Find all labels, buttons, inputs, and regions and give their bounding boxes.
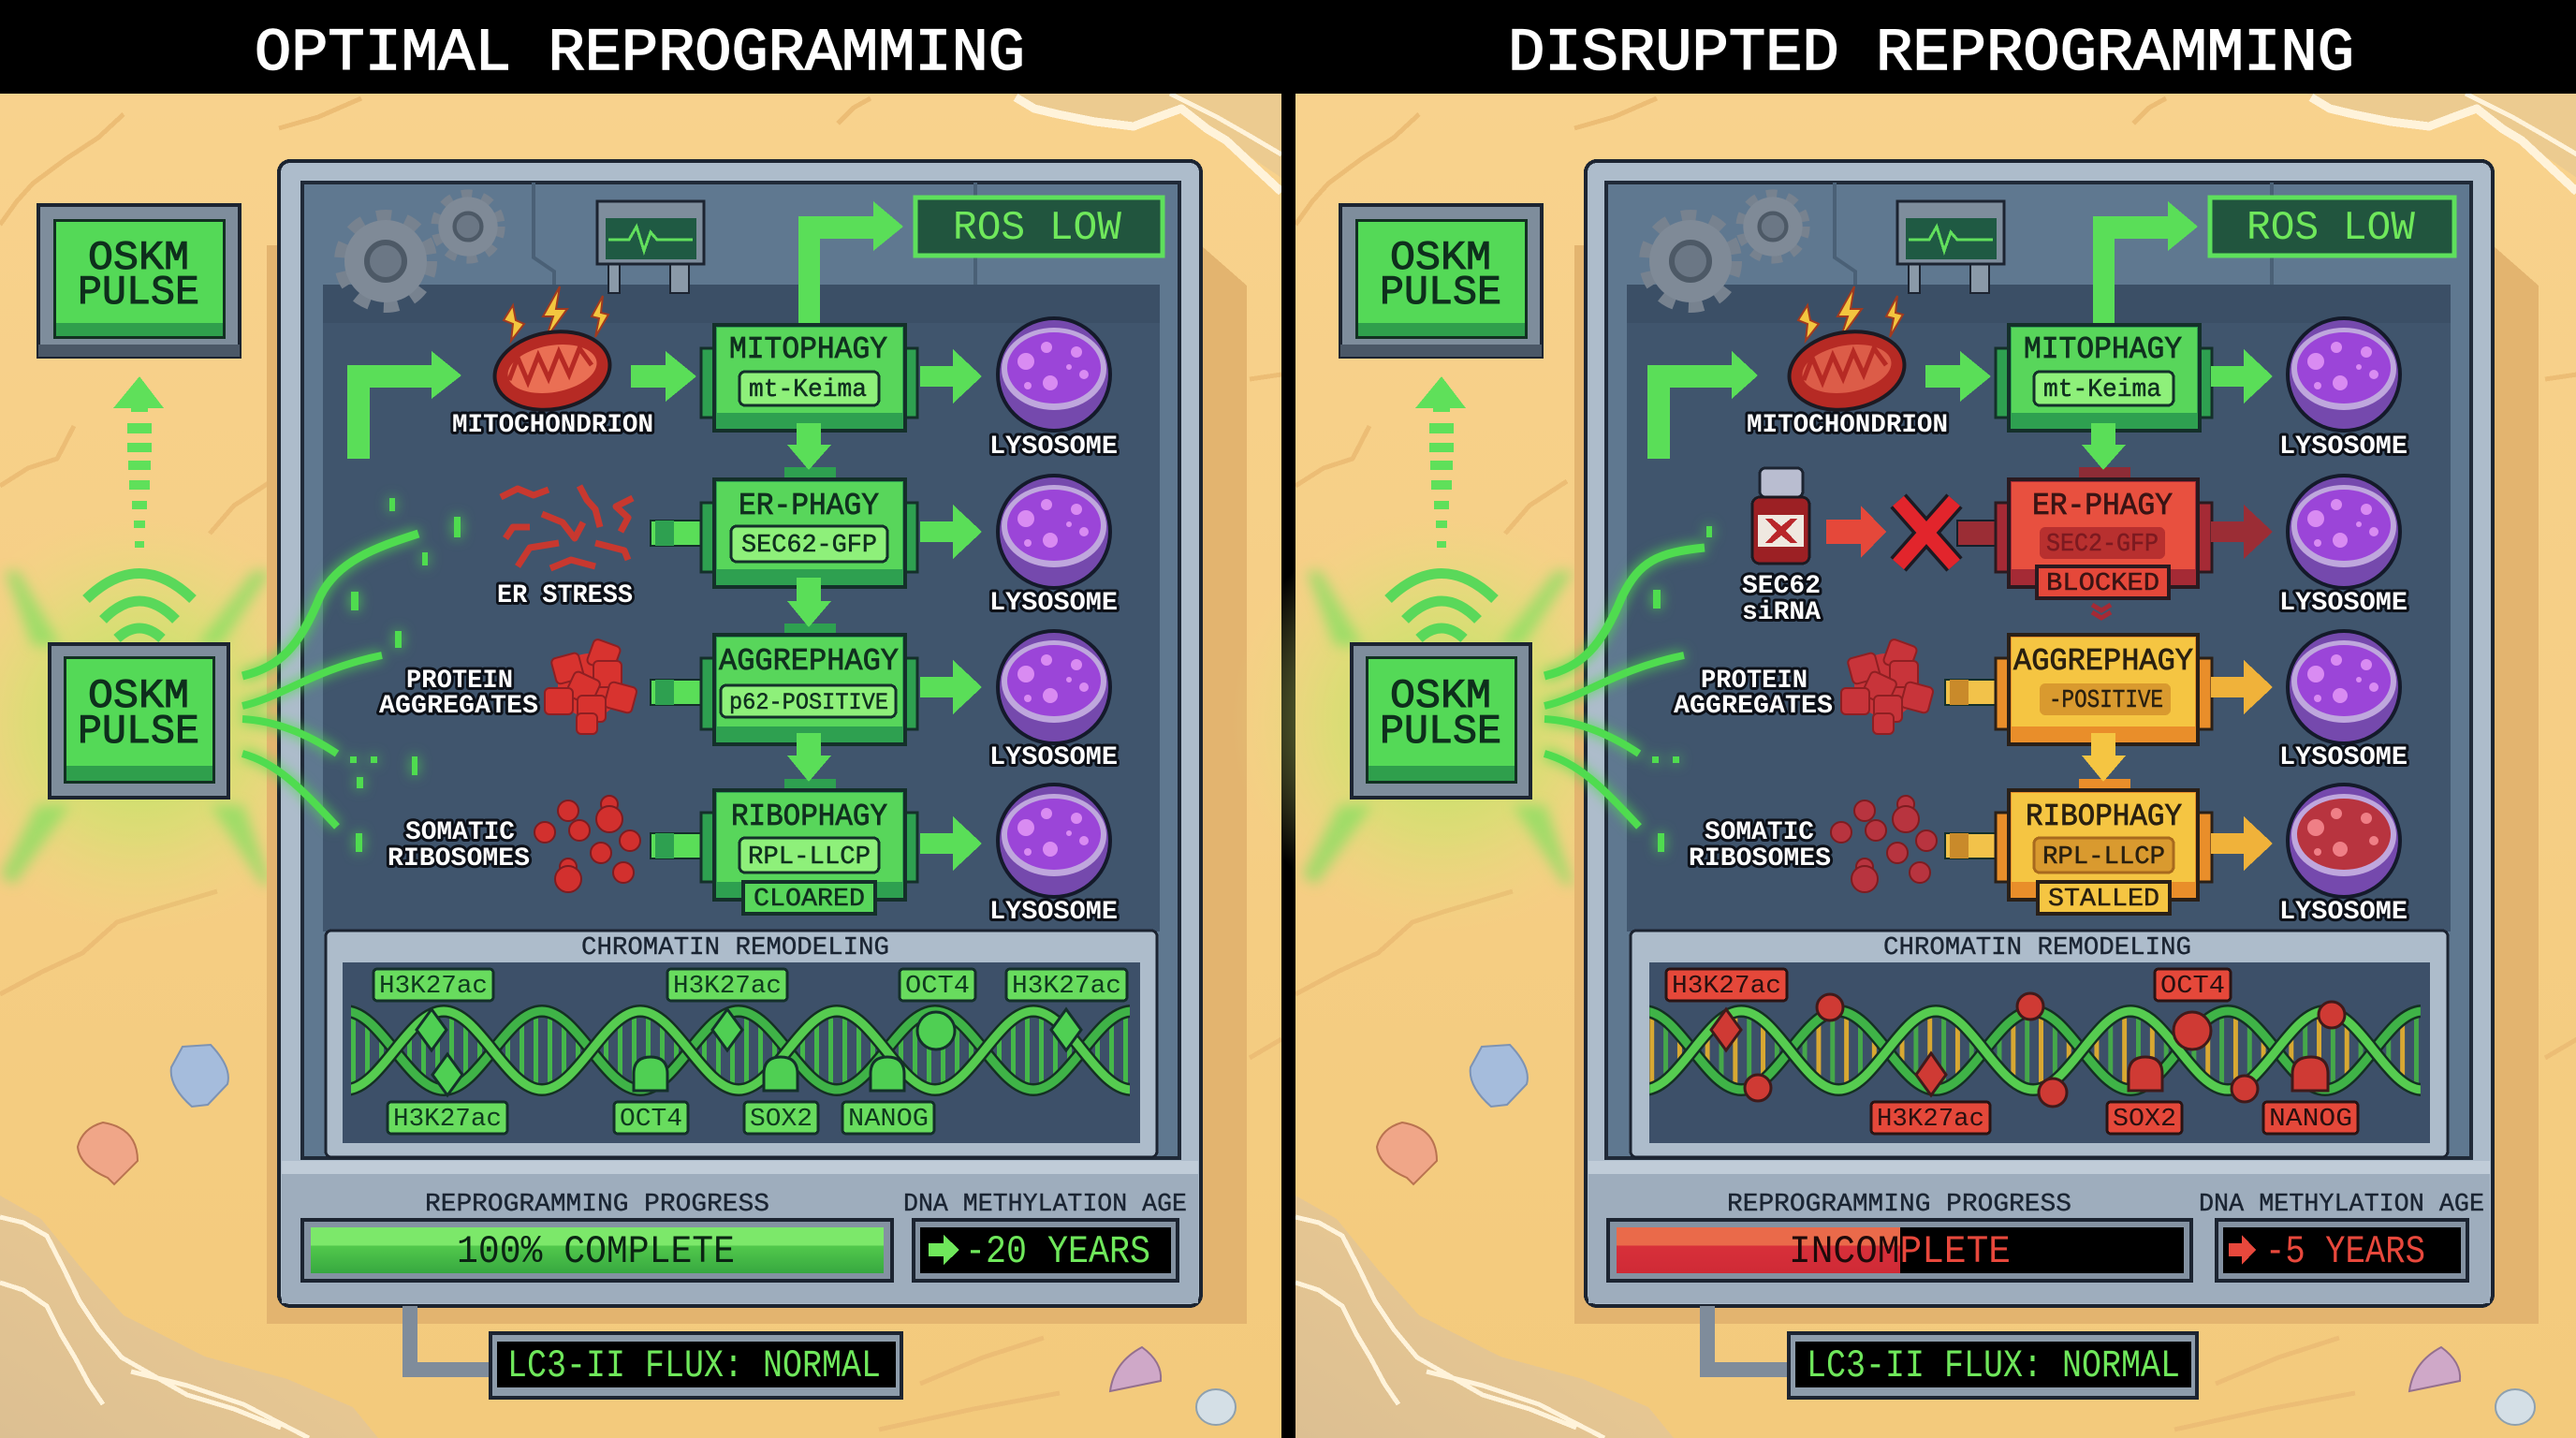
process box: ribophagy: RIBOPHAGY [2026,800,2182,834]
row: ribophagy [388,783,1118,927]
tags [1666,969,2358,1134]
arrow to lysosome [920,660,982,714]
status strip [1588,1161,2490,1303]
arrow: mitophagy to ROS [798,201,903,323]
center divider [1281,0,1295,1438]
label: SEC62 [1742,572,1821,601]
icon: peach shell [1377,1123,1437,1184]
icon: lower OSKM pulse button [50,644,228,798]
flux readout with cable [1707,1306,2197,1398]
tag: SOX2 [2113,1106,2176,1134]
lysosome: red stalled [2286,783,2402,899]
icon: red X block [1898,501,1954,565]
right beach side: pulse buttons and signal [1231,205,1652,932]
LC3-II flux box [1789,1333,2197,1398]
icon: heartbeat monitor [597,201,704,293]
icon: mitochondrion with stress bolts [489,286,616,418]
LC3-II flux box: LC3-II FLUX: NORMAL [1807,1343,2180,1388]
icon: heartbeat monitor [1897,201,2004,293]
icon: blue shell [1471,1045,1528,1107]
device frame [279,161,1201,1306]
process box: ER-phagy [701,479,917,587]
lysosome [996,629,1112,745]
progress bar [302,1220,892,1281]
icon: wireless signal arcs [1388,573,1495,638]
cable [1707,1306,1788,1370]
lysosome label: LYSOSOME [989,589,1118,618]
input stub [1945,680,1996,705]
label: siRNA [1742,598,1821,627]
input stub [1957,521,1997,546]
tag: H3K27ac [393,1106,502,1134]
status: ROS LOW: ROS LOW [2247,205,2416,252]
arrow [1925,351,1991,402]
label: DNA methylation age: DNA METHYLATION AGE [903,1191,1187,1219]
lysosome [996,474,1112,590]
label [1689,818,1831,873]
label: reprogramming progress: REPROGRAMMING PROGRESS [425,1191,769,1219]
process box: aggrephagy [701,635,917,744]
lysosome label: LYSOSOME [2279,743,2408,772]
process box: ribophagy: RPL-LLCP [2042,844,2165,872]
header bar [0,0,2576,94]
icon: ER stress fragments [501,486,633,568]
glow around lower pulse button [0,510,350,932]
status: ROS LOW: ROS LOW [953,205,1122,252]
lysosome label: LYSOSOME [2279,898,2408,927]
arrow to lysosome [2211,816,2273,871]
age readout [2217,1220,2467,1281]
disrupted histone marks [1711,993,2345,1107]
process box: ribophagy [1996,790,2212,914]
label: AGGREGATES [379,692,538,721]
tag: H3K27ac [673,973,782,1001]
icon: protein aggregate clump [1841,638,1934,734]
icon: upper OSKM pulse button: OSKM [1390,235,1491,282]
process box: ribophagy: CLOARED [754,886,865,914]
process box: aggrephagy: AGGREPHAGY [719,644,899,679]
arrow: down to ribophagy [784,733,836,792]
process box: ER-phagy: ER-PHAGY [2032,489,2173,523]
icon: pink shell [2409,1347,2460,1391]
lysosome [2286,316,2402,433]
glow rays [0,571,271,885]
arrow to lysosome [920,505,982,559]
shells: right [1377,1045,2535,1425]
icon: lower OSKM pulse button: OSKM [88,673,189,720]
label: AGGREGATES [1674,692,1833,721]
flux readout with cable [410,1306,901,1398]
lysosome label: LYSOSOME [2279,433,2408,462]
arrow to lysosome [920,816,982,871]
shells: left [78,1045,1236,1425]
age readout: -20 YEARS [965,1229,1150,1274]
icon: protein aggregate clump [545,638,637,734]
icon: blocked flow chevrons [2092,605,2111,618]
tag: H3K27ac [379,973,488,1001]
upper machinery wall [1606,183,2471,1158]
arrow: down to aggrephagy [784,578,836,637]
label: RIBOSOMES [1689,844,1831,873]
label: PROTEIN [1701,667,1808,696]
LC3-II flux box [490,1333,901,1398]
row: ER-phagy [497,474,1118,618]
glow around lower pulse button [1231,510,1652,932]
tag: OCT4 [905,973,970,1001]
label: SOMATIC [1705,818,1814,847]
icon: somatic ribosomes [534,796,640,892]
arrow: mitophagy to ROS [2093,201,2198,323]
age readout: -5 YEARS [2265,1229,2425,1274]
process box: mitophagy: MITOPHAGY [729,332,887,367]
arrow to lysosome [2211,660,2273,714]
arrow: elbow into mitochondrion [347,351,461,459]
process box: mitophagy [1996,325,2212,431]
process box: ER-phagy: ER-PHAGY [739,489,879,523]
title: disrupted: DISRUPTED REPROGRAMMING [1508,21,2354,88]
icon: upper OSKM pulse button: OSKM [88,235,189,282]
tag: H3K27ac [1877,1106,1984,1134]
icon: lower OSKM pulse button [1352,644,1530,798]
lysosome [996,316,1112,433]
arrow: inhibitor [1826,506,1886,558]
label: reprogramming progress: REPROGRAMMING PROGRESS [1727,1191,2071,1219]
row: aggrephagy [379,629,1118,772]
label: ER STRESS [497,581,633,610]
panel shadow: right device [1574,245,2539,1324]
process box: ribophagy: RPL-LLCP [748,844,871,872]
row: mitophagy [1747,286,2408,462]
arrow: down to ribophagy [2079,733,2130,792]
label [1674,667,1833,721]
recessed dark workspace [1627,285,2451,931]
process box: ribophagy [701,790,917,914]
tag: OCT4 [620,1106,682,1134]
process box: ER-phagy: SEC2-GFP [2046,531,2159,559]
icon: peach shell [78,1123,138,1184]
process box: aggrephagy: AGGREPHAGY [2013,644,2193,679]
panel: optimal device [247,161,1201,1306]
heading: CHROMATIN REMODELING [581,934,889,962]
icon: white pebble [1196,1389,1236,1425]
lysosome [2286,629,2402,745]
sand background: left panel [0,94,1281,1438]
process box: aggrephagy: p62-POSITIVE [729,689,888,716]
panel: disrupted device [1546,161,2493,1306]
heading: CHROMATIN REMODELING [1883,934,2191,962]
arrow: down to ER-phagy [784,423,836,480]
process box: ribophagy: RIBOPHAGY [731,800,887,834]
DNA helix [1649,1005,2421,1096]
status strip [282,1161,1198,1303]
row: mitophagy [452,286,1118,462]
lysosome label: LYSOSOME [989,898,1118,927]
arrow to lysosome [2211,349,2273,404]
pulse streams: right [1544,526,1712,852]
input stub [651,521,701,546]
process box: mitophagy: mt-Keima [2043,376,2161,404]
icon: upper OSKM pulse button [38,205,240,357]
process box: mitophagy [701,325,917,431]
panel: chromatin remodeling [1546,931,2448,1157]
sand background: right panel [1295,94,2576,1438]
tag: NANOG [848,1106,929,1134]
shoreline and sand texture: left [0,94,1281,1438]
arrow: dashed upward signal [113,376,164,548]
label [1742,572,1821,627]
progress bar: 100% COMPLETE [457,1229,735,1274]
lysosome label: LYSOSOME [2279,589,2408,618]
icon: mitochondrion with stress bolts [1783,286,1910,418]
icon: pink shell [1110,1347,1161,1391]
icon: upper OSKM pulse button [1340,205,1542,357]
icon: upper OSKM pulse button: PULSE [1380,270,1501,316]
icon: white pebble [2496,1389,2535,1425]
left beach side: pulse buttons and signal [0,205,350,932]
row: ER-phagy blocked [1742,468,2408,627]
process box: aggrephagy: -POSITIVE [2049,687,2163,715]
glow rays [1302,571,1573,885]
icon: upper OSKM pulse button: PULSE [78,270,199,316]
tag: OCT4 [2160,973,2225,1001]
lysosome label: LYSOSOME [989,743,1118,772]
panel: chromatin remodeling [247,931,1157,1157]
icon: somatic ribosomes [1831,796,1937,892]
progress bar: INCOMPLETE [1789,1229,2011,1274]
icon: wireless signal arcs [86,573,193,638]
cable [410,1306,490,1370]
label [379,667,538,721]
label: RIBOSOMES [388,844,530,873]
DNA helix [351,1005,1130,1096]
input stub [651,680,701,705]
icon: lower OSKM pulse button: PULSE [78,709,199,756]
label [388,818,530,873]
panel shadow: left device [267,245,1247,1324]
status: ROS LOW [915,198,1163,256]
icon: gears [343,196,499,304]
icon: blue shell [171,1045,228,1107]
process box: ribophagy: STALLED [2048,886,2159,914]
icon: gears [1647,196,1804,304]
progress bar [1608,1220,2191,1281]
input stub [1945,833,1996,858]
lysosome label: LYSOSOME [989,433,1118,462]
icon: SEC62 siRNA vial [1752,468,1809,564]
age readout [914,1220,1178,1281]
shoreline and sand texture: right [1295,94,2576,1438]
label: PROTEIN [406,667,513,696]
LC3-II flux box: LC3-II FLUX: NORMAL [507,1343,881,1388]
arrow: elbow into mitochondrion [1647,351,1758,459]
tag: H3K27ac [1012,973,1121,1001]
process box: ER-phagy [1996,479,2212,598]
icon: lower OSKM pulse button: OSKM [1390,673,1491,720]
arrow [631,351,696,402]
pulse streams: left [242,498,461,852]
process box: ER-phagy: BLOCKED [2046,570,2159,598]
process box: ER-phagy: SEC62-GFP [741,532,877,560]
device frame [1586,161,2493,1306]
histone marks [417,1009,1081,1095]
icon: lower OSKM pulse button: PULSE [1380,709,1501,756]
process box: aggrephagy [1996,635,2212,744]
label: MITOCHONDRION [452,411,653,440]
process box: mitophagy: mt-Keima [749,376,867,404]
row: ribophagy stalled [1689,783,2408,927]
arrow to lysosome [2211,505,2273,559]
lysosome [2286,474,2402,590]
label: SOMATIC [405,818,515,847]
tag: NANOG [2269,1106,2352,1134]
arrow to lysosome [920,349,982,404]
tag: SOX2 [750,1106,812,1134]
tags [373,969,1127,1134]
arrow: down to ER-phagy [2079,423,2130,480]
lysosome [996,783,1112,899]
tag: H3K27ac [1672,973,1781,1001]
arrow: dashed upward signal [1415,376,1466,548]
label: MITOCHONDRION [1747,411,1948,440]
process box: mitophagy: MITOPHAGY [2024,332,2182,367]
recessed dark workspace [323,285,1160,931]
title: optimal: OPTIMAL REPROGRAMMING [255,21,1025,88]
input stub [651,833,701,858]
status: ROS LOW [2210,198,2454,256]
row: aggrephagy [1674,629,2408,772]
upper machinery wall [302,183,1179,1158]
label: DNA methylation age: DNA METHYLATION AGE [2199,1191,2484,1219]
